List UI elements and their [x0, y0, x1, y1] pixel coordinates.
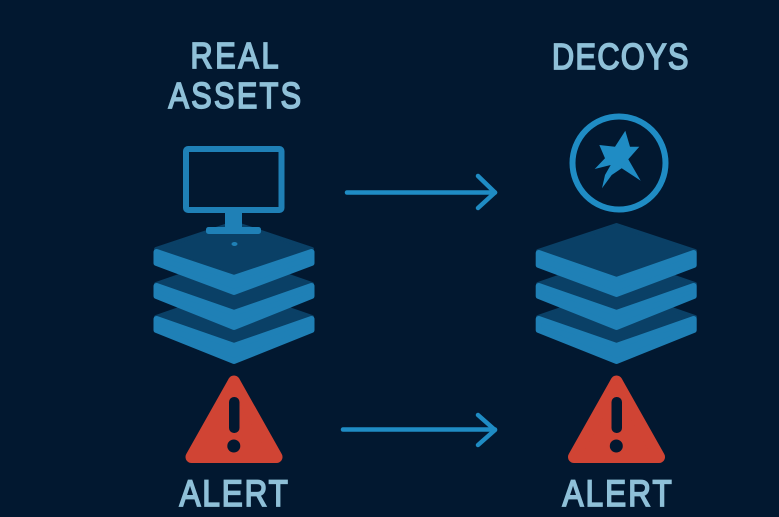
label: real alert: ALERT	[180, 474, 288, 515]
label: decoy alert: ALERT	[562, 474, 672, 515]
icon: real server stack	[156, 223, 312, 361]
heading: real assets: REAL	[190, 37, 278, 77]
arrow: top	[347, 176, 495, 208]
icon: monitor	[186, 149, 282, 246]
heading: real assets	[168, 37, 301, 117]
icon: decoy alert triangle	[574, 382, 659, 457]
icon: decoy server stack	[538, 225, 695, 361]
icon: decoy star badge	[572, 116, 666, 210]
heading: decoys: DECOYS	[552, 38, 688, 78]
arrow: bottom	[343, 415, 495, 445]
heading: real assets: ASSETS	[168, 77, 301, 117]
icon: real alert triangle	[192, 382, 276, 457]
